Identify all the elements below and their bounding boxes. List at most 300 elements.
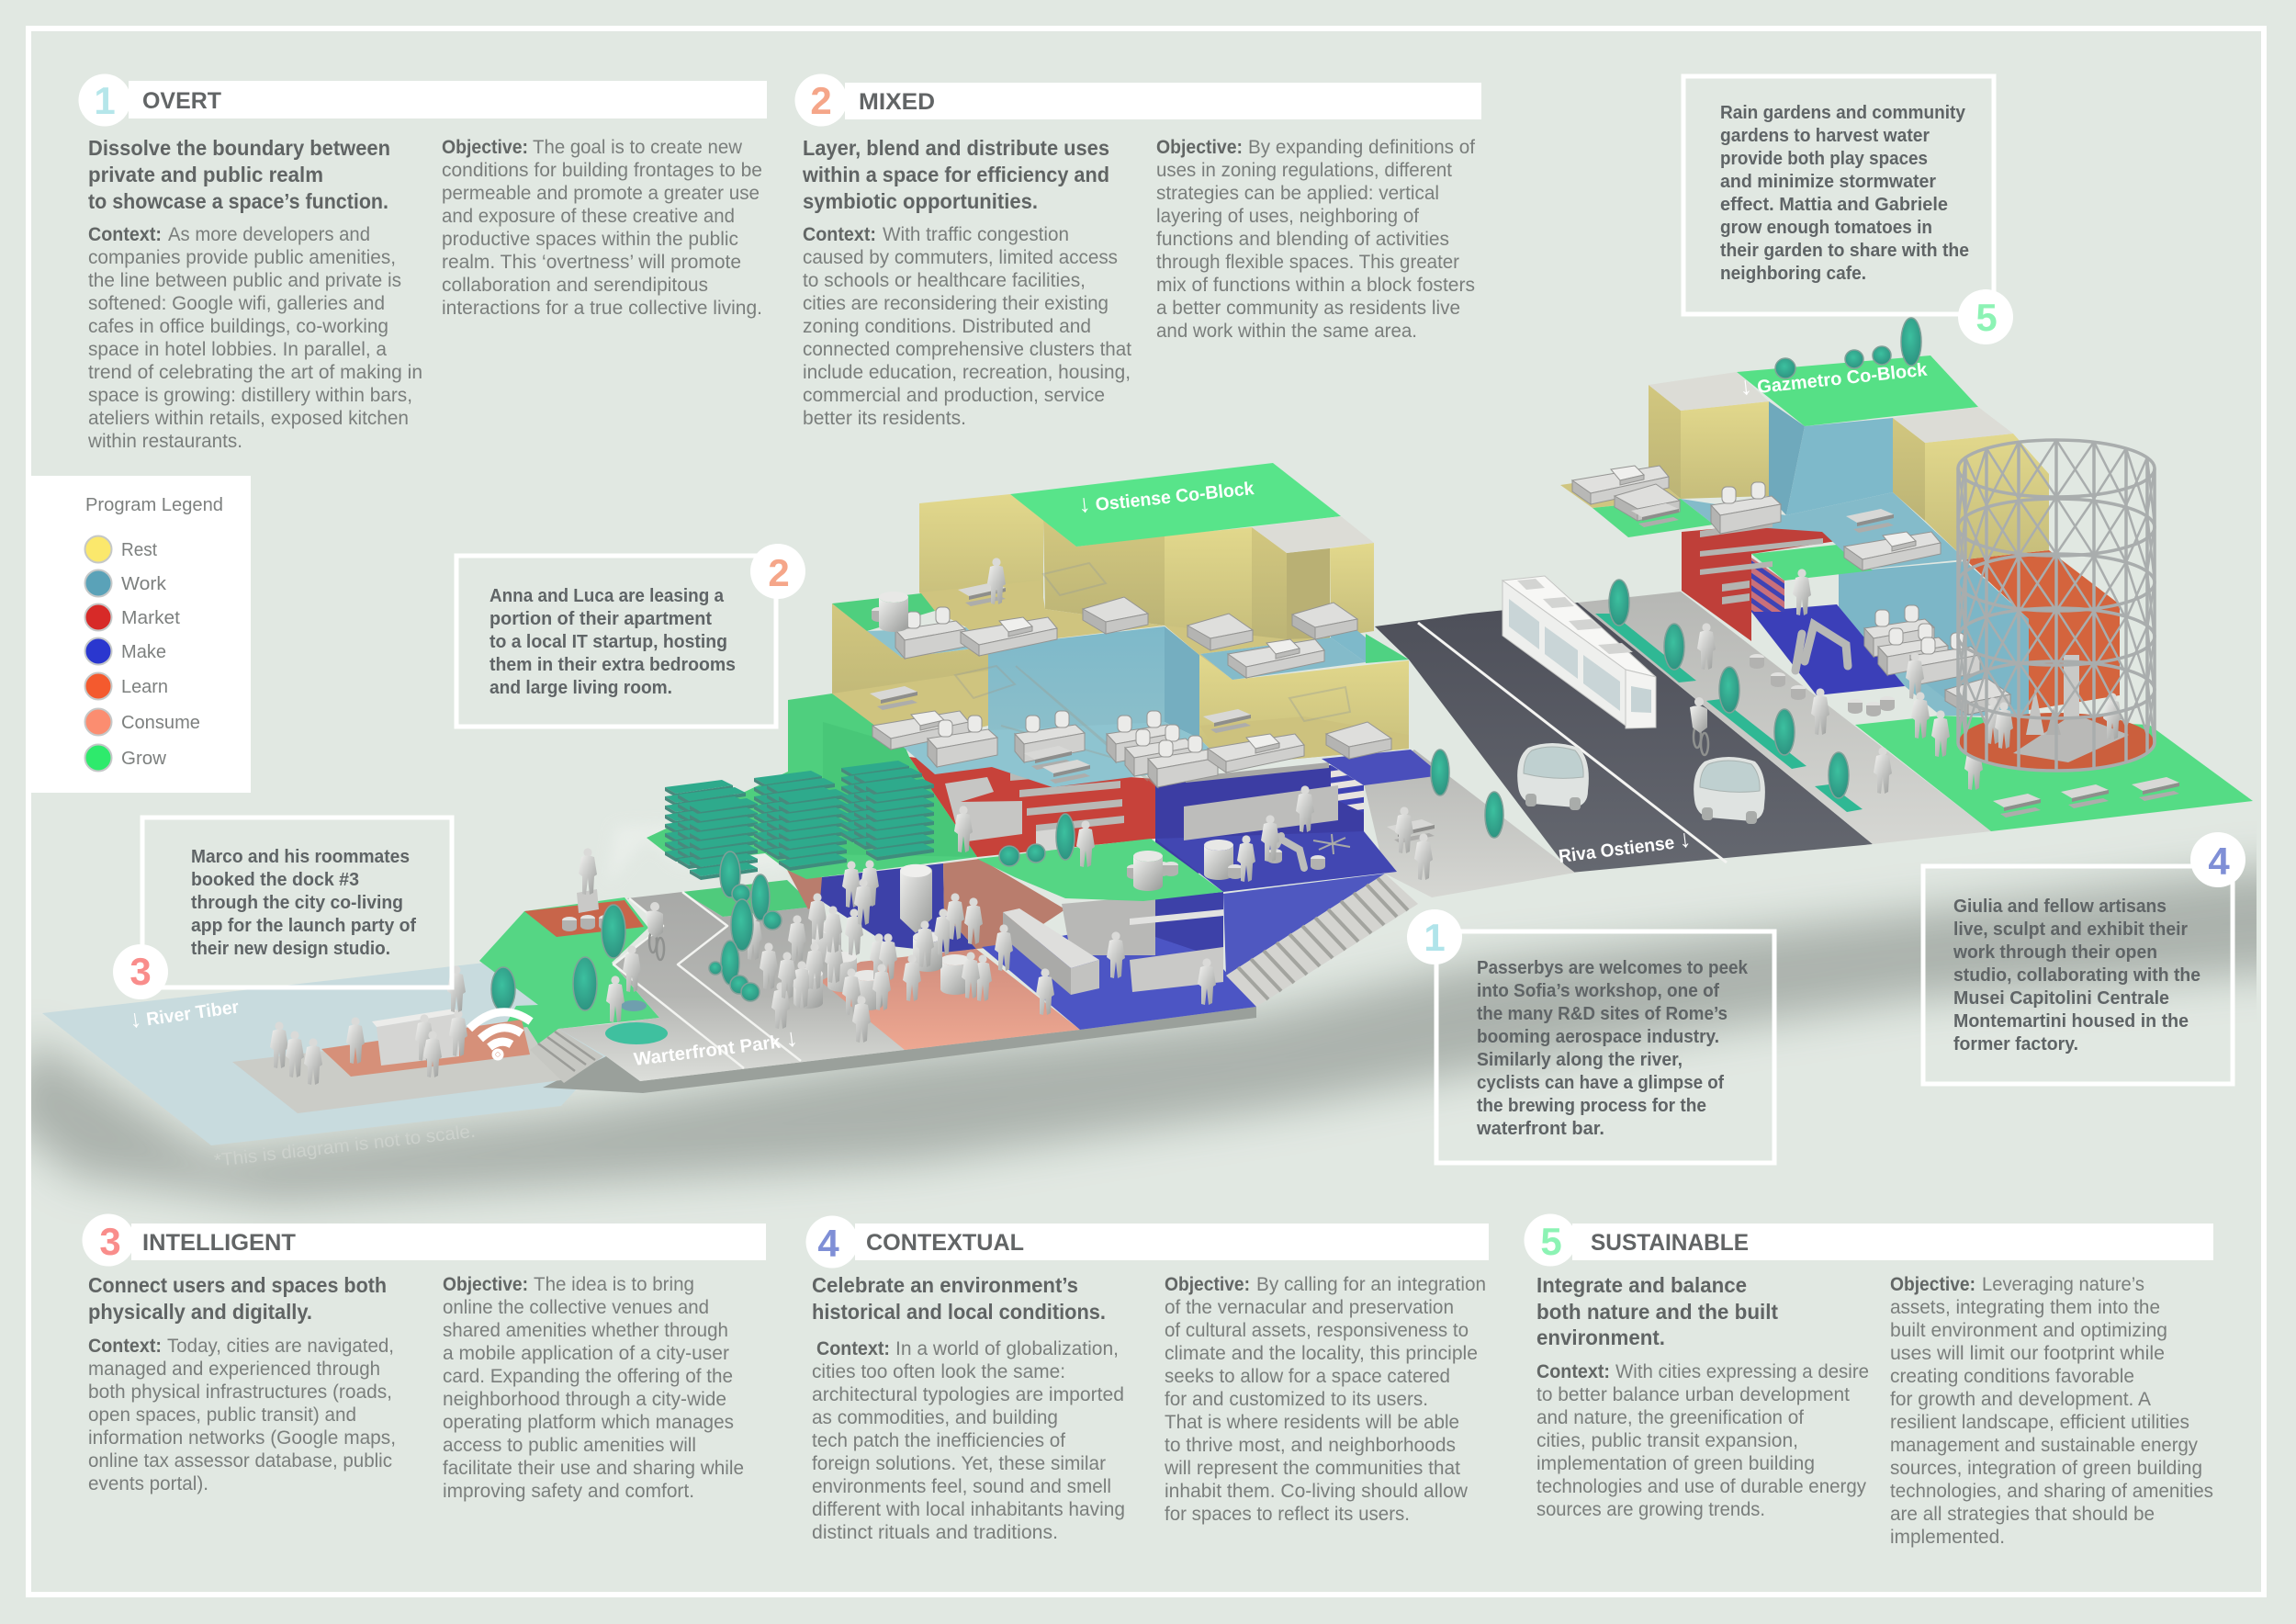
callout 2 text xyxy=(490,586,736,698)
large blue plinth xyxy=(1223,874,1385,976)
callout: 5 rain gardens xyxy=(1683,76,2013,344)
blue wall piece xyxy=(1155,892,1223,960)
objective text: to thrive most, and neighborhoods xyxy=(1165,1435,1456,1456)
objective text xyxy=(1164,1274,1486,1525)
callout 4 text: live, sculpt and exhibit their xyxy=(1953,919,2188,940)
callout 3 badge: 3 xyxy=(129,950,152,993)
number: 2 xyxy=(810,79,832,122)
callout 4 badge xyxy=(2190,832,2245,887)
callout: 4 giulia xyxy=(1923,832,2245,1084)
context text: events portal). xyxy=(88,1473,208,1494)
callout 3 text: through the city co-living xyxy=(191,893,403,913)
heading: symbiotic opportunities. xyxy=(803,189,1038,213)
waterfront park paving xyxy=(558,892,905,1081)
objective text: shared amenities whether through xyxy=(443,1320,728,1341)
objective text: layering of uses, neighboring of xyxy=(1156,206,1419,227)
terrace furniture xyxy=(562,889,613,931)
gas holder base xyxy=(1959,713,2154,772)
dock and river people xyxy=(270,848,664,1085)
callout 3 text: their new design studio. xyxy=(191,939,390,959)
make floor xyxy=(1751,604,1905,695)
callout 1 text: booming aerospace industry. xyxy=(1477,1027,1719,1047)
number: 1 xyxy=(94,79,116,122)
upper yellow front wall xyxy=(1681,401,1769,499)
context text: both physical infrastructures (roads, xyxy=(88,1382,392,1403)
legend: grow: Grow xyxy=(121,749,167,769)
context text: Today, cities are navigated, xyxy=(167,1336,394,1357)
context text: cafes in office buildings, co-working xyxy=(88,316,388,337)
number badge xyxy=(83,1214,134,1266)
context text: include education, recreation, housing, xyxy=(803,362,1131,383)
robot arm xyxy=(1795,625,1848,671)
callout 2 text: to a local IT startup, hosting xyxy=(490,632,727,652)
green roof xyxy=(1737,355,1978,426)
context text: Context: xyxy=(1536,1361,1610,1382)
objective text: Objective: xyxy=(443,1274,528,1295)
context text: trend of celebrating the art of making in xyxy=(88,362,422,383)
hydroponic tray racks xyxy=(665,761,934,880)
workshop stools xyxy=(1204,840,1325,880)
green terrace xyxy=(1593,499,1714,537)
header band xyxy=(855,1224,1489,1260)
terrace red plaza xyxy=(524,900,644,937)
upper left green terrace xyxy=(832,593,935,631)
level two right yellow wall xyxy=(1199,655,1409,765)
context text: caused by commuters, limited access xyxy=(803,247,1118,268)
context text: companies provide public amenities, xyxy=(88,247,396,268)
level two yellow wall xyxy=(832,603,988,730)
callout 2 text: portion of their apartment xyxy=(490,609,712,629)
header band xyxy=(129,81,767,118)
objective text: and exposure of these creative and xyxy=(442,206,735,227)
callout 4 text: former factory. xyxy=(1953,1034,2078,1054)
objective text: management and sustainable energy xyxy=(1890,1435,2198,1456)
ostiense co-block xyxy=(647,463,1442,1050)
callout 1 text: waterfront bar. xyxy=(1476,1119,1604,1139)
context text: cities, public transit expansion, xyxy=(1536,1430,1798,1451)
objective text: sources, integration of green building xyxy=(1890,1458,2202,1479)
objective text: functions and blending of activities xyxy=(1156,229,1449,250)
callout 5 badge: 5 xyxy=(1975,296,1998,339)
planting strips xyxy=(1595,614,1863,812)
context text: better its residents. xyxy=(803,408,966,429)
isometric neighbourhood diagram xyxy=(0,318,2296,1203)
objective text: Objective: xyxy=(1165,1274,1250,1295)
ostiense grey roof xyxy=(1252,516,1374,553)
objective text: climate and the locality, this principle xyxy=(1165,1343,1478,1364)
context text: managed and experienced through xyxy=(88,1359,380,1380)
objective text: access to public amenities will xyxy=(443,1435,696,1456)
blue make floor xyxy=(982,919,1256,1030)
number badge xyxy=(1525,1214,1576,1266)
ostiense green roof xyxy=(1010,463,1341,547)
objective text: are all strategies that should be xyxy=(1890,1504,2155,1525)
panel: 1 overt xyxy=(79,73,767,452)
objective text: implemented. xyxy=(1890,1527,2005,1548)
objective text: The idea is to bring xyxy=(534,1274,694,1295)
market shelves and boxes xyxy=(945,762,1139,854)
ostiense furniture xyxy=(870,582,1391,787)
hatched wall xyxy=(1751,558,1784,612)
green deck with trays xyxy=(647,694,977,879)
level two blue floor xyxy=(902,722,1226,787)
park benches xyxy=(1993,777,2179,818)
objective text: inhabit them. Co-living should allow xyxy=(1165,1481,1469,1502)
upper yellow side wall xyxy=(1649,385,1681,499)
heading: both nature and the built xyxy=(1536,1300,1778,1324)
heading xyxy=(812,1273,1106,1324)
brewing tanks xyxy=(900,864,932,933)
legend: grow xyxy=(84,744,167,772)
callout 5 badge xyxy=(1958,289,2013,344)
context text: space in hotel lobbies. In parallel, a xyxy=(88,339,387,360)
icon: wifi xyxy=(469,1012,531,1056)
section title: MIXED xyxy=(859,89,935,115)
section title: CONTEXTUAL xyxy=(866,1230,1024,1256)
objective text: assets, integrating them into the xyxy=(1890,1297,2160,1318)
context text: zoning conditions. Distributed and xyxy=(803,316,1091,337)
heading xyxy=(88,136,390,213)
main stairs xyxy=(1226,874,1418,1007)
tram xyxy=(1503,576,1656,728)
label: waterfront park: Warterfront Park ↓ xyxy=(632,1023,799,1071)
context text: implementation of green building xyxy=(1536,1453,1815,1474)
market shelves xyxy=(1700,521,1823,604)
centre blue side wall xyxy=(1769,401,1805,515)
ghost furniture outlines xyxy=(955,563,1350,788)
second green deck xyxy=(977,839,1223,901)
callout 1 text xyxy=(1476,958,1749,1139)
blue floor xyxy=(1681,492,1965,570)
callout 1 text: into Sofia’s workshop, one of xyxy=(1477,981,1719,1001)
objective text: will represent the communities that xyxy=(1164,1458,1460,1479)
context text: cities are reconsidering their existing xyxy=(803,293,1109,314)
objective text: realm. This ‘overtness’ will promote xyxy=(442,252,741,273)
header band xyxy=(845,83,1481,119)
context text: technologies and use of durable energy xyxy=(1536,1476,1866,1497)
objective text xyxy=(1156,137,1475,342)
central blue wall xyxy=(988,626,1165,735)
legend: work: Work xyxy=(121,574,167,594)
callout 4 text: Montemartini housed in the xyxy=(1953,1011,2189,1032)
left roof xyxy=(1649,372,1769,411)
workshop stripes xyxy=(1331,765,1364,813)
heading: Layer, blend and distribute uses xyxy=(803,136,1109,160)
plinth wall under stairs xyxy=(543,1007,1256,1093)
callout 1 text: cyclists can have a glimpse of xyxy=(1477,1073,1724,1093)
callout: 3 marco xyxy=(113,818,452,999)
context text: as commodities, and building xyxy=(812,1407,1058,1428)
consume floor xyxy=(820,949,1080,1050)
upper left blue deck xyxy=(867,627,986,658)
brewery blue wall xyxy=(820,863,976,953)
niche wall xyxy=(1287,548,1330,642)
callout: 1 passerbys xyxy=(1407,909,1774,1163)
context text: to schools or healthcare facilities, xyxy=(803,270,1086,291)
legend: make: Make xyxy=(121,642,166,662)
market wall xyxy=(1682,519,1837,641)
legend title: Program Legend xyxy=(85,495,223,515)
number: 5 xyxy=(1540,1220,1562,1263)
objective text: permeable and promote a greater use xyxy=(442,183,760,204)
level two right floor xyxy=(1199,716,1409,765)
panel: 3 intelligent xyxy=(83,1214,766,1502)
objective text: online the collective venues and xyxy=(443,1297,709,1318)
market floor xyxy=(909,757,1155,857)
label: ostiense co-block: ↓ Ostiense Co-Block xyxy=(1076,472,1255,518)
right roof xyxy=(1893,407,2013,443)
yellow floor xyxy=(1560,472,1681,508)
heading xyxy=(802,136,1109,213)
legend: make xyxy=(84,637,166,665)
context text xyxy=(1536,1361,1869,1520)
heading: to showcase a space’s function. xyxy=(88,189,388,213)
river tiber water xyxy=(42,963,606,1145)
objective text: improving safety and comfort. xyxy=(443,1481,694,1502)
objective text: creating conditions favorable xyxy=(1890,1366,2134,1387)
translucent blue panel xyxy=(1331,609,1366,662)
section title: OVERT xyxy=(142,88,221,114)
objective text: facilitate their use and sharing while xyxy=(443,1458,744,1479)
objective text: collaboration and serendipitous xyxy=(442,275,708,296)
picnic table xyxy=(1387,819,1435,843)
roof side wall xyxy=(1043,520,1165,626)
panel: program legend xyxy=(31,476,251,793)
callout 3 text xyxy=(191,847,416,959)
objective text: By expanding definitions of xyxy=(1248,137,1475,158)
context text: Context: xyxy=(88,1336,162,1357)
callout 4 text xyxy=(1953,897,2200,1054)
right blue deck xyxy=(1200,637,1366,680)
heading: Celebrate an environment’s xyxy=(812,1273,1078,1297)
panel: 4 contextual xyxy=(806,1216,1489,1543)
callout 4 text: Musei Capitolini Centrale xyxy=(1953,988,2169,1009)
objective text: uses will limit our footprint while xyxy=(1890,1343,2165,1364)
number badge xyxy=(79,73,130,127)
context text: distinct rituals and traditions. xyxy=(812,1522,1058,1543)
header band xyxy=(131,1224,766,1260)
objective text: productive spaces within the public xyxy=(442,229,738,250)
heading: Dissolve the boundary between xyxy=(88,136,390,160)
callout 1 badge xyxy=(1407,909,1462,964)
callout 5 text: and minimize stormwater xyxy=(1720,172,1936,192)
objective text: Objective: xyxy=(1156,137,1243,158)
callout 5 text: grow enough tomatoes in xyxy=(1720,218,1932,238)
objective text: and work within the same area. xyxy=(1156,321,1417,342)
context text: to better balance urban development xyxy=(1536,1384,1850,1405)
context text: Context: xyxy=(803,224,876,245)
wall return xyxy=(1252,527,1287,642)
objective text: That is where residents will be able xyxy=(1165,1412,1459,1433)
central blue side wall xyxy=(1165,626,1199,739)
callout 3 text: booked the dock #3 xyxy=(191,870,359,890)
objective text: card. Expanding the offering of the xyxy=(443,1366,733,1387)
bar counter xyxy=(1003,908,1099,995)
objective text: for growth and development. A xyxy=(1890,1389,2151,1410)
green terrain xyxy=(479,897,659,1053)
objective text: interactions for a true collective living. xyxy=(442,298,762,319)
callout 4 badge: 4 xyxy=(2208,840,2230,883)
number: 4 xyxy=(817,1222,839,1265)
ground shadow xyxy=(0,868,2296,1203)
legend: rest xyxy=(84,536,157,562)
gazmetro people xyxy=(1690,569,1983,794)
heading xyxy=(88,1273,387,1324)
number badge xyxy=(806,1216,858,1268)
gazmetro green plaza xyxy=(1855,716,2253,831)
context text: softened: Google wifi, galleries and xyxy=(88,293,385,314)
label: gazmetro co-block: ↓ Gazmetro Co-Block xyxy=(1738,354,1929,400)
right yellow side wall xyxy=(1893,418,1925,521)
front counter xyxy=(1130,909,1223,992)
road riva ostiense xyxy=(1375,603,1873,873)
legend: rest: Rest xyxy=(121,540,157,560)
context text: With cities expressing a desire xyxy=(1615,1361,1869,1382)
heading: Integrate and balance xyxy=(1536,1273,1747,1297)
callout 1 text: Similarly along the river, xyxy=(1477,1050,1683,1070)
context text xyxy=(87,224,422,452)
teal mound and fountain disc xyxy=(605,1000,668,1044)
context text: Context: xyxy=(816,1338,890,1359)
context text: tech patch the inefficiencies of xyxy=(812,1430,1065,1451)
objective text: operating platform which manages xyxy=(443,1412,734,1433)
objective text: conditions for building frontages to be xyxy=(442,160,762,181)
sidewalk between road and gazmetro xyxy=(1578,592,1991,844)
barrels xyxy=(793,922,970,1010)
objective text: a better community as residents live xyxy=(1156,298,1460,319)
objective text: for and customized to its users. xyxy=(1165,1389,1428,1410)
objective text: resilient landscape, efficient utilities xyxy=(1890,1412,2189,1433)
objective text: a mobile application of a city-user xyxy=(443,1343,729,1364)
callout 3 text: Marco and his roommates xyxy=(191,847,410,867)
legend: consume xyxy=(84,709,200,735)
callout 5 text: gardens to harvest water xyxy=(1720,126,1930,146)
objective text: Objective: xyxy=(1890,1274,1975,1295)
number: 3 xyxy=(99,1220,121,1263)
panel: 5 sustainable xyxy=(1525,1214,2213,1548)
objective text: of cultural assets, responsiveness to xyxy=(1165,1320,1469,1341)
label: river tiber: ↓ River Tiber xyxy=(128,991,241,1033)
callout 2 text: them in their extra bedrooms xyxy=(490,655,736,675)
callout 1 text: the many R&D sites of Rome’s xyxy=(1477,1004,1728,1024)
context text: the line between public and private is xyxy=(88,270,401,291)
objective text xyxy=(443,1274,744,1502)
pale ground patch xyxy=(606,822,787,886)
level three floor xyxy=(919,581,1165,647)
road centre line xyxy=(1418,623,1727,863)
cycle path lines xyxy=(613,892,801,1068)
context text: sources are growing trends. xyxy=(1536,1499,1765,1520)
header band xyxy=(1572,1224,2213,1260)
deck block shading xyxy=(823,722,977,857)
context text: information networks (Google maps, xyxy=(88,1427,396,1449)
small green deck xyxy=(1751,545,1873,581)
callout 5 text xyxy=(1720,103,1969,284)
section title: SUSTAINABLE xyxy=(1591,1230,1749,1256)
dock stairs xyxy=(530,1029,603,1083)
context text: open spaces, public transit) and xyxy=(88,1404,356,1426)
gazmetro co-block xyxy=(1560,355,2253,831)
legend: market xyxy=(84,604,180,630)
right tall wall xyxy=(1165,527,1252,642)
heading: private and public realm xyxy=(88,163,323,186)
gazmetro furniture xyxy=(1572,466,2010,716)
objective text: for spaces to reflect its users. xyxy=(1165,1504,1410,1525)
objective text: mix of functions within a block fosters xyxy=(1156,275,1475,296)
heading: physically and digitally. xyxy=(88,1300,312,1324)
context text: different with local inhabitants having xyxy=(812,1499,1125,1520)
objective text: seeks to allow for a space catered xyxy=(1165,1366,1450,1387)
callout 2 text: and large living room. xyxy=(490,678,672,698)
objective text: of the vernacular and preservation xyxy=(1165,1297,1454,1318)
context text: Context: xyxy=(88,224,162,245)
callout 2 badge: 2 xyxy=(768,551,790,594)
green patch by path xyxy=(682,880,815,917)
context text: As more developers and xyxy=(168,224,370,245)
callout 1 badge: 1 xyxy=(1424,916,1446,959)
objective text: Objective: xyxy=(442,137,528,158)
legend: learn: Learn xyxy=(121,677,168,697)
objective text xyxy=(1890,1274,2213,1548)
callout 3 badge xyxy=(113,944,168,999)
level three upper back wall xyxy=(919,494,1043,607)
panel: 2 mixed xyxy=(795,73,1481,429)
objective text: The goal is to create new xyxy=(533,137,743,158)
callout 5 text: their garden to share with the xyxy=(1720,241,1969,261)
autonomous pods xyxy=(1517,743,1765,824)
end wall xyxy=(1330,543,1374,637)
callout 1 text: the brewing process for the xyxy=(1477,1096,1706,1116)
legend: market: Market xyxy=(121,608,180,628)
heading: Connect users and spaces both xyxy=(88,1273,387,1297)
dock bench xyxy=(372,1009,459,1066)
level two yellow floor xyxy=(832,671,988,746)
workshop floor xyxy=(1155,831,1397,892)
context text: connected comprehensive clusters that xyxy=(803,339,1131,360)
deck planters xyxy=(1127,851,1178,891)
objective text: By calling for an integration xyxy=(1256,1274,1486,1295)
context text: ateliers within retails, exposed kitchen xyxy=(88,408,409,429)
context text xyxy=(812,1338,1125,1543)
gas holder frame xyxy=(1958,440,2155,771)
sculptures xyxy=(1984,655,2129,762)
callout 4 text: work through their open xyxy=(1953,942,2157,963)
workshop robot arm xyxy=(1267,831,1304,868)
callout 3 text: app for the launch party of xyxy=(191,916,416,936)
callout 2 text: Anna and Luca are leasing a xyxy=(490,586,725,606)
legend: work xyxy=(84,570,167,597)
dock consume zone xyxy=(321,1020,530,1077)
note: not to scale: *This is diagram is not to scale. xyxy=(213,1122,477,1171)
callout 5 text: neighboring cafe. xyxy=(1720,264,1866,284)
back counter wall xyxy=(1062,896,1155,955)
legend: consume: Consume xyxy=(121,713,200,733)
context text xyxy=(88,1336,396,1494)
label: riva ostiense: Riva Ostiense ↓ xyxy=(1557,825,1693,868)
legend: learn xyxy=(84,672,168,700)
right level three floor xyxy=(1165,626,1331,680)
context text xyxy=(803,224,1131,429)
salmon wall back left xyxy=(787,870,822,909)
callout 2 badge xyxy=(750,544,805,599)
centre blue wall xyxy=(1786,418,1893,515)
workshop counter xyxy=(1184,762,1338,840)
callout 4 text: Giulia and fellow artisans xyxy=(1953,897,2167,917)
consume wall xyxy=(943,859,1065,949)
objective text: through flexible spaces. This greater xyxy=(1156,252,1459,273)
context text: online tax assessor database, public xyxy=(88,1450,392,1472)
context text: environments feel, sound and smell xyxy=(812,1476,1111,1497)
